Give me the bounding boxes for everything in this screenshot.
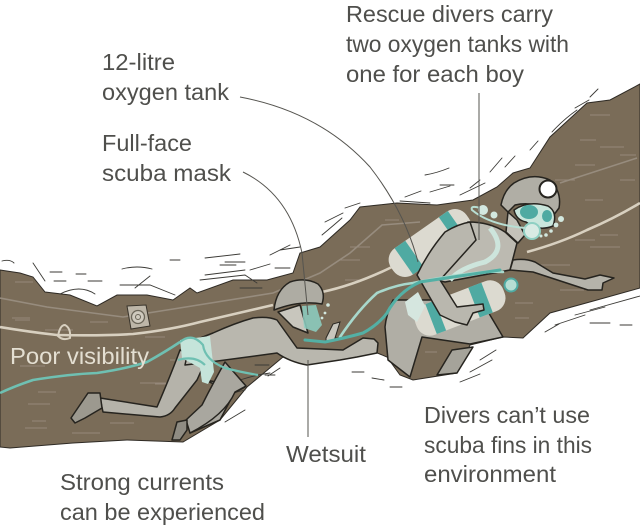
- lower calf: [437, 347, 473, 375]
- right diver: [383, 177, 614, 377]
- upper tank: [383, 204, 477, 282]
- second guide line: [0, 158, 637, 317]
- far leg and hip: [385, 300, 503, 377]
- hip harness: [405, 292, 425, 322]
- lower tank: [410, 276, 510, 340]
- tank valve: [504, 278, 518, 292]
- rear foot: [172, 420, 187, 440]
- label: rescue divers: Rescue divers carry: [346, 1, 553, 27]
- label: fins: scuba fins in this: [424, 432, 592, 458]
- helmet: [501, 177, 560, 216]
- label: currents: Strong currents: [60, 469, 224, 495]
- face: [278, 305, 308, 333]
- near arm: [417, 222, 484, 325]
- diver left crawling: [71, 280, 378, 440]
- regulator: [524, 223, 540, 239]
- helmet: [274, 280, 323, 310]
- cave passage: [0, 84, 640, 448]
- label: wetsuit: Wetsuit: [286, 441, 366, 467]
- left diver mask: [302, 305, 322, 332]
- rear leg: [100, 350, 206, 417]
- label: scuba mask: Full-face: [102, 130, 192, 156]
- label: rescue divers: two oxygen tanks with: [346, 31, 569, 57]
- label: fins: environment: [424, 461, 556, 487]
- left diver spare hand: [326, 322, 345, 342]
- rear shoe: [71, 393, 102, 423]
- label: oxygen tank: [102, 49, 229, 105]
- guide rope: [0, 203, 640, 335]
- label: fins: [424, 402, 592, 487]
- lamp: [540, 180, 556, 198]
- label: fins: Divers can’t use: [424, 402, 590, 428]
- label: oxygen tank: oxygen tank: [102, 79, 229, 105]
- right arm: [510, 259, 614, 290]
- label: rescue divers: one for each boy: [346, 61, 524, 87]
- face mask: [514, 204, 555, 228]
- rope anchor: [58, 325, 70, 339]
- chest strap: [450, 228, 498, 280]
- label: currents: [60, 469, 265, 525]
- label: scuba mask: [102, 130, 231, 186]
- label: scuba mask: scuba mask: [102, 160, 231, 186]
- cave wall snow texture: [2, 89, 640, 422]
- label: rescue divers: [346, 1, 569, 87]
- torso: [418, 222, 517, 282]
- air hoses right diver: [305, 207, 525, 342]
- label: currents: can be experienced: [60, 499, 265, 525]
- leader lines: [240, 93, 479, 437]
- neck: [506, 212, 525, 243]
- label: poor visibility: Poor visibility: [10, 343, 149, 369]
- bubbles: [321, 205, 564, 319]
- label: oxygen tank: 12-litre: [102, 49, 175, 75]
- torso and arm: [185, 317, 378, 365]
- front thigh and lower leg: [187, 380, 245, 433]
- wall plate: [127, 305, 150, 329]
- harness: [180, 336, 214, 384]
- teal air hose left diver: [0, 342, 180, 393]
